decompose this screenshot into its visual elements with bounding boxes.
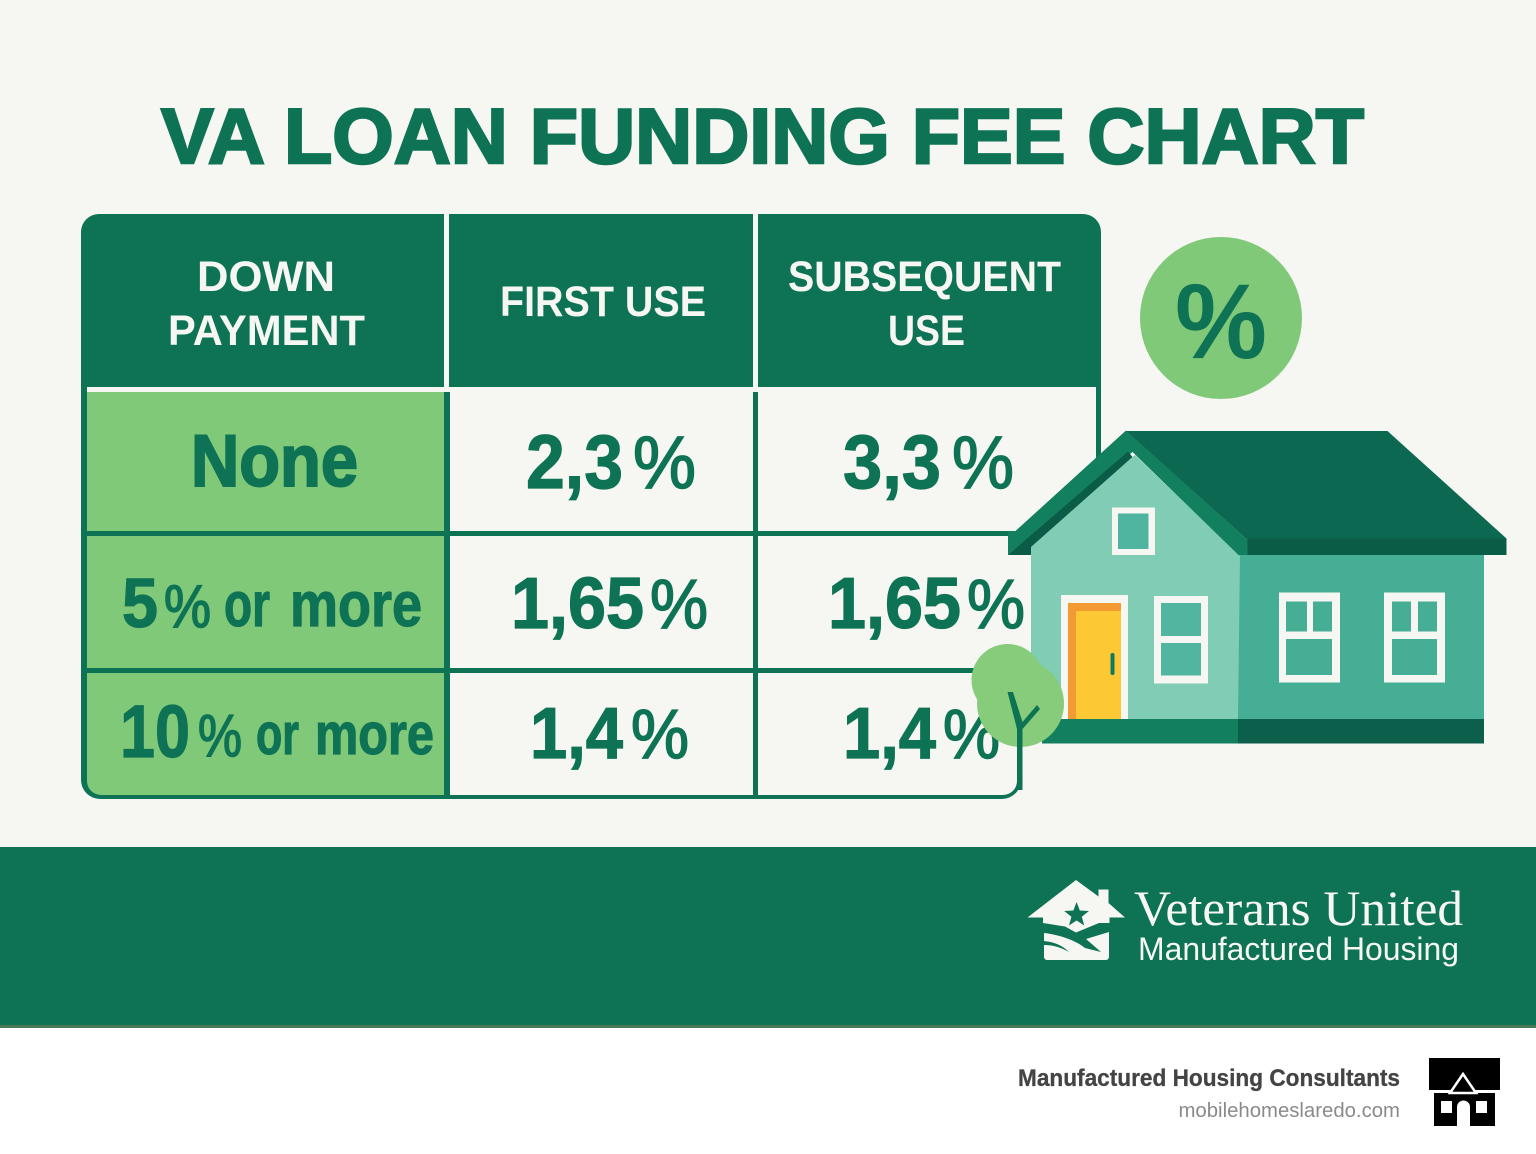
- logo text: Veterans United: [1134, 880, 1463, 936]
- row labels background: [87, 392, 444, 795]
- gable trim: [1008, 430, 1248, 555]
- logo text: Manufactured Housing: [1138, 931, 1459, 967]
- row: 10% or more: %: [631, 695, 689, 773]
- icon: percent badge: %: [1175, 261, 1267, 381]
- gable wall: [1031, 455, 1240, 719]
- row: 5% or more: %: [650, 565, 708, 643]
- row: none: [191, 420, 1014, 505]
- row: 10% or more: [120, 690, 1000, 774]
- row: none: 3,3: [843, 420, 941, 505]
- header: down payment: [168, 253, 365, 355]
- row: 5% or more: or: [224, 570, 270, 640]
- icon: company house: [1429, 1058, 1500, 1126]
- table frame: [81, 214, 1101, 799]
- row: 10% or more: %: [943, 695, 1000, 773]
- row: 5% or more: more: [290, 570, 422, 640]
- row: 5% or more: [122, 564, 1025, 644]
- side window left: [1279, 592, 1340, 682]
- header: first use: FIRST USE: [500, 278, 706, 326]
- side window right: [1384, 592, 1445, 682]
- door: [1061, 595, 1128, 719]
- row: 10% or more: 1,4: [843, 694, 936, 774]
- header: subsequent use: USE: [888, 307, 965, 355]
- row: 10% or more: more: [315, 702, 434, 767]
- icon: tree: [972, 644, 1064, 790]
- header: subsequent use: [788, 253, 1061, 355]
- row: 10% or more: %: [198, 703, 242, 769]
- header: down payment: DOWN: [197, 253, 335, 301]
- icon: percent badge: [1140, 237, 1302, 399]
- row: 5% or more: 1,65: [828, 564, 961, 644]
- row: 5% or more: 1,65: [511, 564, 644, 644]
- row: none: 2,3: [526, 420, 623, 505]
- footer band: [0, 847, 1536, 1154]
- foundation: [1042, 719, 1238, 744]
- row: 10% or more: 1,4: [530, 694, 623, 774]
- row: 10% or more: or: [256, 702, 299, 767]
- row: 10% or more: 10: [120, 690, 190, 773]
- company name: Manufactured Housing Consultants: [1018, 1065, 1400, 1092]
- header: subsequent use: SUBSEQUENT: [788, 253, 1061, 301]
- title: VA LOAN FUNDING FEE CHART: [161, 92, 1364, 180]
- row: 5% or more: %: [967, 565, 1025, 643]
- row: 5% or more: %: [164, 573, 211, 640]
- row: none: %: [633, 421, 696, 504]
- right wall: [1238, 555, 1484, 719]
- icon: house: [1008, 430, 1506, 744]
- roof: [1126, 431, 1506, 555]
- row: 5% or more: 5: [122, 564, 158, 642]
- gable window: [1112, 508, 1155, 555]
- logo text: [1134, 880, 1463, 967]
- header dividers: [87, 214, 1096, 392]
- header: down payment: PAYMENT: [168, 307, 365, 355]
- row: none: None: [191, 421, 358, 502]
- panel: fee table: [81, 214, 1111, 810]
- body cells: [450, 392, 1111, 810]
- row: none: %: [952, 421, 1014, 504]
- front window: [1154, 596, 1208, 684]
- company url: mobilehomeslaredo.com: [1178, 1100, 1400, 1122]
- logo: veterans united mark: [1028, 880, 1125, 960]
